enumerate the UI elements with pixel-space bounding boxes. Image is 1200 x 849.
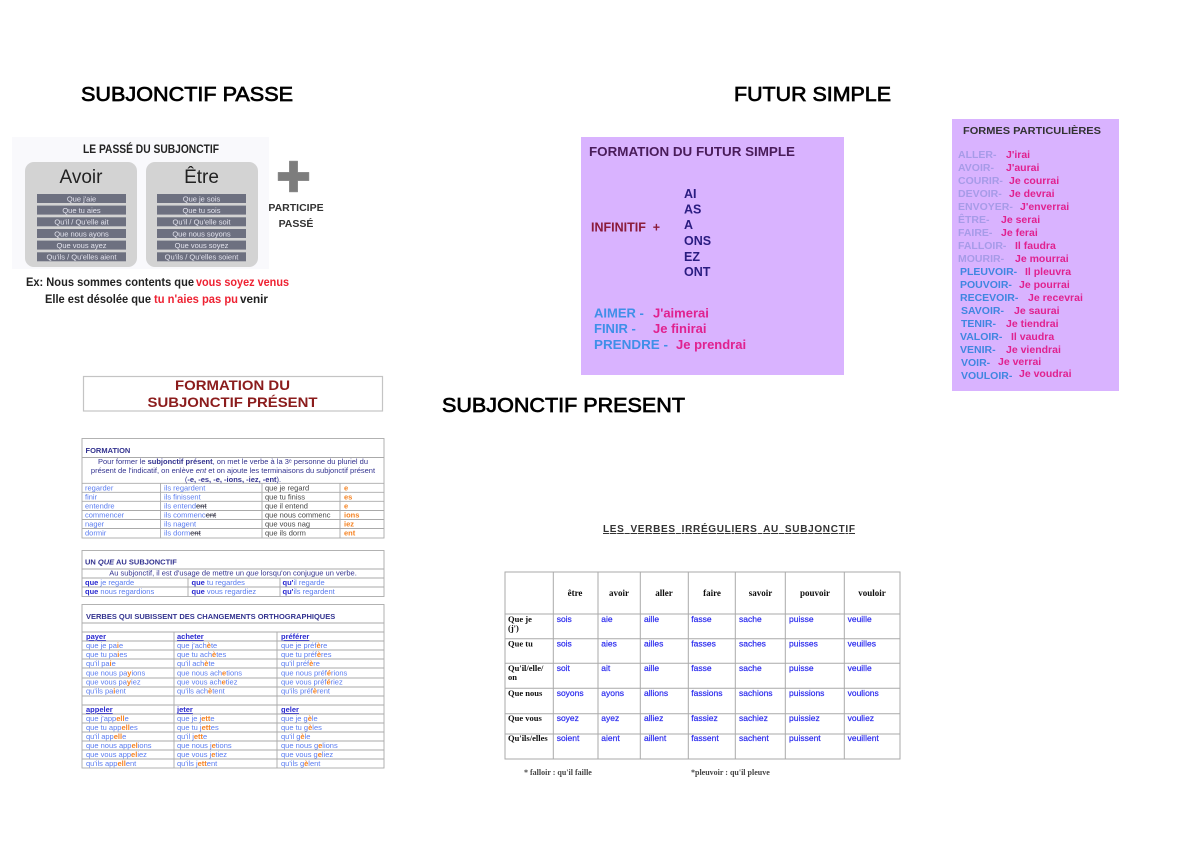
irregular futures list: Il pleuvra	[1025, 266, 1071, 278]
panel: les verbes irréguliers au subjonctif	[505, 522, 900, 777]
table: formation: dormir	[85, 528, 107, 538]
table grid and cells: soyez	[557, 713, 579, 723]
table grid and cells: Que tu	[508, 638, 533, 648]
table grid and cells: puissent	[789, 733, 821, 743]
table grid and cells: savoir	[749, 588, 772, 598]
table: changements orthographiques: que je jette	[177, 714, 215, 723]
table grid and cells: faire	[703, 588, 721, 598]
table grid and cells: fassent	[691, 733, 719, 743]
label: participe passé	[268, 202, 324, 230]
examples: Ex: Nous sommes contents que	[26, 277, 194, 289]
table: formation: FORMATION	[86, 446, 130, 455]
table: changements orthographiques: que vous geliez	[281, 750, 333, 759]
card: être: Qu'il / Qu'elle soit	[173, 218, 231, 227]
panel title: LE PASSÉ DU SUBJONCTIF	[83, 143, 219, 156]
card: avoir: Qu'ils / Qu'elles aient	[47, 253, 117, 262]
examples: Elle est désolée que	[45, 294, 151, 306]
table grid and cells: Que nous	[508, 688, 543, 698]
card: avoir: Que j'aie	[67, 194, 96, 203]
card: avoir: Que nous ayons	[54, 229, 109, 238]
table grid and cells: Que je	[508, 614, 532, 624]
table: formation: ils dorment	[164, 528, 202, 538]
table: changements orthographiques: que tu achètes	[177, 650, 226, 659]
irregular futures list: Je courrai	[1009, 175, 1059, 187]
table: formation: présent de l'indicatif, on enlève ent et on ajoute les terminaisons du subjonctif présent	[91, 466, 376, 475]
table grid and cells: puissiez	[789, 713, 820, 723]
table: formation: finir	[85, 492, 98, 502]
table: changements orthographiques: que vous jetiez	[177, 750, 227, 759]
table grid and cells: ailles	[644, 638, 663, 648]
table: un que au subjonctif: que nous regardions	[85, 587, 154, 596]
table grid and cells: aller	[655, 588, 673, 598]
examples: PRENDRE -	[594, 337, 668, 352]
table grid and cells: (j')	[508, 623, 519, 633]
table: formation: regarder	[85, 484, 114, 492]
irregular futures list: FALLOIR-	[958, 240, 1007, 252]
irregular futures list: VOULOIR-	[961, 370, 1013, 382]
table grid and cells: alliez	[644, 713, 663, 723]
card: avoir: Qu'il / Qu'elle ait	[54, 218, 109, 227]
examples: Je finirai	[653, 321, 706, 336]
table: formation: que tu finiss	[265, 492, 305, 502]
label: participe passé: PARTICIPE	[268, 202, 324, 214]
table: changements orthographiques: que je gèle	[281, 714, 318, 723]
table: formation: que il entend	[265, 502, 308, 510]
table: changements orthographiques: que j'appelle	[86, 714, 129, 723]
table: changements orthographiques: jeter	[176, 705, 193, 714]
examples: venir	[240, 294, 269, 306]
table: changements orthographiques: acheter	[177, 632, 204, 641]
table: changements orthographiques: qu'ils achètent	[177, 686, 226, 696]
table: changements orthographiques: qu'il jette	[177, 732, 207, 741]
table grid and cells: veuille	[848, 614, 872, 624]
card: avoir	[25, 162, 137, 267]
table: changements orthographiques: qu'ils paient	[86, 686, 127, 696]
title box	[84, 376, 382, 411]
table grid and cells: sois	[557, 614, 572, 624]
table: changements orthographiques: que nous achetions	[177, 668, 242, 678]
card: avoir: Que tu aies	[62, 206, 101, 215]
table grid and cells: sache	[739, 614, 762, 624]
table grid and cells: veuilles	[848, 638, 876, 648]
irregular futures list: Je tiendrai	[1006, 318, 1059, 330]
irregular futures list: Je pourrai	[1019, 279, 1070, 291]
table: changements orthographiques: payer	[86, 632, 106, 641]
table: changements orthographiques: que tu gèles	[281, 723, 322, 732]
table grid and cells: aille	[644, 663, 659, 673]
footnotes: * falloir : qu'il faille	[524, 768, 592, 777]
table grid and cells	[505, 572, 900, 759]
table: formation: es	[344, 492, 352, 502]
table grid and cells: fasse	[691, 614, 712, 624]
table grid and cells: aille	[644, 614, 659, 624]
irregular futures list: Je mourrai	[1015, 253, 1069, 265]
infinitif plus: INFINITIF +	[591, 220, 660, 234]
card: être: Qu'ils / Qu'elles soient	[165, 253, 239, 262]
footnotes: *pleuvoir : qu'il pleuve	[691, 768, 770, 777]
table grid and cells: sache	[739, 663, 762, 673]
irregular futures list: TENIR-	[961, 318, 996, 330]
table grid and cells: fasse	[691, 663, 712, 673]
table grid and cells: sachions	[739, 688, 773, 698]
table: un que au subjonctif: qu'ils regardent	[282, 587, 336, 596]
panel: le passé du subjonctif	[12, 137, 324, 306]
table grid and cells: Qu'ils/elles	[508, 733, 548, 743]
table: formation: que nous commenc	[265, 510, 331, 520]
table: changements orthographiques: geler	[281, 705, 299, 714]
table grid and cells: puisses	[789, 638, 818, 648]
table: formation: nager	[85, 520, 105, 528]
table: changements orthographiques: que vous payiez	[86, 678, 141, 686]
irregular futures list: J'aurai	[1006, 162, 1040, 174]
table: changements orthographiques: que tu jettes	[177, 723, 219, 732]
endings list: EZ	[684, 250, 700, 264]
table grid and cells: puisse	[789, 663, 814, 673]
table: changements orthographiques	[82, 604, 384, 768]
irregular futures list: ALLER-	[958, 149, 997, 161]
footnotes	[524, 768, 770, 777]
table: formation: e	[344, 484, 348, 492]
table grid and cells: vouliez	[848, 713, 874, 723]
card: avoir: Avoir	[60, 167, 103, 188]
endings list: ONT	[684, 265, 711, 279]
table grid and cells: fassions	[691, 688, 722, 698]
table: changements orthographiques: appeler	[86, 705, 113, 714]
table: changements orthographiques: que vous achetiez	[177, 678, 238, 686]
irregular futures list	[958, 149, 1083, 382]
table: changements orthographiques: qu'ils préfèrent	[281, 686, 331, 696]
irregular futures list: Je serai	[1001, 214, 1040, 226]
table: formation: ils commencent	[164, 510, 217, 520]
table grid and cells: sachiez	[739, 713, 768, 723]
panel title: FORMATION DU FUTUR SIMPLE	[589, 145, 795, 159]
table grid and cells: aillent	[644, 733, 667, 743]
table: formation: commencer	[85, 510, 125, 520]
table: changements orthographiques: que nous gelions	[281, 741, 338, 750]
table grid and cells: voulions	[848, 688, 879, 698]
endings list: ONS	[684, 234, 711, 248]
table: formation: ils entendent	[164, 502, 207, 510]
endings list: A	[684, 218, 693, 232]
table: un que au subjonctif: Au subjonctif, il est d'usage de mettre un que lorsqu'on conjugue un verbe.	[109, 569, 357, 578]
table grid and cells: pouvoir	[800, 588, 830, 598]
endings list: AI	[684, 187, 696, 201]
examples	[594, 306, 746, 352]
table: changements orthographiques: qu'il achète	[177, 659, 215, 668]
table grid and cells: puissions	[789, 688, 824, 698]
table: formation: ions	[344, 510, 359, 520]
irregular futures list: Je viendrai	[1006, 344, 1061, 356]
table: changements orthographiques: que nous jetions	[177, 741, 232, 750]
irregular futures list: Il faudra	[1015, 240, 1056, 252]
heading: futur simple: FUTUR SIMPLE	[734, 84, 891, 106]
table grid and cells: puisse	[789, 614, 814, 624]
table: formation: que vous nag	[265, 520, 310, 528]
table: formation: Pour former le subjonctif présent, on met le verbe à la 3ᵉ personne du pluriel du	[98, 457, 368, 466]
table: formation: que je regard	[265, 484, 309, 492]
table grid and cells: aies	[601, 638, 617, 648]
table: changements orthographiques: que tu appelles	[86, 723, 138, 732]
table grid and cells: saches	[739, 638, 766, 648]
table grid and cells: aie	[601, 614, 613, 624]
irregular futures list: Il vaudra	[1011, 331, 1054, 343]
irregular futures list: FAIRE-	[958, 227, 993, 239]
table: changements orthographiques: VERBES QUI SUBISSENT DES CHANGEMENTS ORTHOGRAPHIQUES	[86, 612, 335, 621]
table: changements orthographiques: qu'il appelle	[86, 732, 126, 741]
table: changements orthographiques: que tu préfères	[281, 650, 332, 659]
heading: subjonctif present: SUBJONCTIF PRESENT	[442, 395, 685, 417]
table: formation: ils regardent	[164, 484, 206, 492]
irregular futures list: Je voudrai	[1019, 368, 1072, 380]
irregular futures list: ÊTRE-	[958, 213, 990, 226]
table: formation: que ils dorm	[265, 528, 306, 538]
irregular futures list: ENVOYER-	[958, 201, 1013, 213]
panel: formation du futur simple	[581, 137, 844, 375]
panel: formation du subjonctif présent	[82, 376, 384, 768]
icon: plus sign	[278, 161, 309, 192]
heading: subjonctif passe: SUBJONCTIF PASSE	[81, 84, 293, 106]
irregular futures list: VOIR-	[961, 357, 991, 369]
panel: formes particulières	[952, 119, 1119, 391]
irregular futures list: Je devrai	[1009, 188, 1055, 200]
irregular futures list: Je recevrai	[1028, 292, 1083, 304]
irregular futures list: J'enverrai	[1020, 201, 1069, 213]
table: changements orthographiques: qu'ils gèlent	[281, 759, 321, 768]
table grid and cells: ayez	[601, 713, 619, 723]
irregular futures list: RECEVOIR-	[960, 292, 1019, 304]
title box: FORMATION DU	[175, 377, 290, 393]
examples: Je prendrai	[676, 337, 746, 352]
table grid and cells: ait	[601, 663, 611, 673]
irregular futures list: POUVOIR-	[960, 279, 1012, 291]
table grid and cells: ayons	[601, 688, 624, 698]
card: être: Être	[184, 166, 219, 188]
table: changements orthographiques: que je paie	[86, 641, 123, 650]
table grid and cells: être	[568, 588, 582, 598]
endings list	[684, 187, 711, 279]
table grid and cells: vouloir	[858, 588, 886, 598]
table grid and cells: veuillent	[848, 733, 879, 743]
table: changements orthographiques: qu'il paie	[86, 659, 116, 668]
panel title: FORMES PARTICULIÈRES	[963, 124, 1101, 137]
card: être: Que vous soyez	[175, 241, 229, 250]
card: avoir: Que vous ayez	[56, 241, 107, 250]
irregular futures list: MOURIR-	[958, 253, 1005, 265]
table: un que au subjonctif: que je regarde	[85, 578, 134, 587]
table grid and cells: fasses	[691, 638, 716, 648]
irregular futures list: DEVOIR-	[958, 188, 1002, 200]
table grid and cells: aient	[601, 733, 620, 743]
irregular futures list: J'irai	[1006, 149, 1030, 161]
table: changements orthographiques: qu'ils appellent	[86, 759, 137, 768]
irregular futures list: Je verrai	[998, 356, 1041, 368]
label: participe passé: PASSÉ	[279, 217, 313, 230]
table: changements orthographiques: que vous préfériez	[281, 678, 343, 686]
table: formation: entendre	[85, 502, 115, 510]
table: formation	[82, 438, 384, 538]
panel title: LES VERBES IRRÉGULIERS AU SUBJONCTIF	[603, 522, 855, 535]
table grid and cells: sachent	[739, 733, 769, 743]
table grid and cells: soit	[557, 663, 571, 673]
table: formation: ent	[344, 528, 356, 538]
irregular futures list: Je saurai	[1014, 305, 1060, 317]
table: un que au subjonctif: que vous regardiez	[192, 587, 256, 596]
examples: vous soyez venus	[196, 277, 289, 289]
title box: SUBJONCTIF PRÉSENT	[148, 394, 318, 410]
table: formation: ils finissent	[164, 492, 202, 502]
irregular futures list: SAVOIR-	[961, 305, 1004, 317]
table: changements orthographiques: préférer	[281, 632, 309, 641]
table: un que au subjonctif: qu'il regarde	[282, 578, 325, 587]
table: changements orthographiques: que je préfère	[281, 641, 327, 650]
table grid and cells: soient	[557, 733, 580, 743]
table grid and cells: soyons	[557, 688, 584, 698]
table grid and cells: allions	[644, 688, 668, 698]
irregular futures list: Je ferai	[1001, 227, 1038, 239]
table: changements orthographiques: qu'il préfère	[281, 659, 320, 668]
table: changements orthographiques: qu'ils jettent	[177, 759, 218, 768]
card: être: Que nous soyons	[172, 229, 231, 238]
examples: tu n'aies pas pu	[154, 294, 238, 306]
irregular futures list: VALOIR-	[960, 331, 1003, 343]
table: changements orthographiques: que nous appelions	[86, 741, 152, 750]
irregular futures list: VENIR-	[960, 344, 996, 356]
examples: J'aimerai	[653, 306, 709, 320]
card: être	[146, 162, 258, 267]
card: être: Que tu sois	[183, 206, 221, 215]
table: un que au subjonctif	[82, 550, 384, 596]
table: changements orthographiques: que vous appeliez	[86, 750, 147, 759]
table: changements orthographiques: que nous payions	[86, 668, 145, 678]
table grid and cells: on	[508, 672, 517, 682]
examples: AIMER -	[594, 306, 644, 320]
table: changements orthographiques: que j'achète	[177, 641, 217, 650]
table: changements orthographiques: que nous préférions	[281, 668, 348, 678]
table grid and cells: avoir	[609, 588, 629, 598]
card: être: Que je sois	[183, 194, 221, 203]
table grid and cells: sois	[557, 638, 572, 648]
table grid and cells: Que vous	[508, 713, 542, 723]
table: formation: ils nagent	[164, 520, 197, 528]
table: un que au subjonctif: UN QUE AU SUBJONCTIF	[85, 558, 177, 567]
table: formation: (-e, -es, -e, -ions, -iez, -ent).	[185, 475, 281, 484]
table grid and cells: Qu'il/elle/	[508, 663, 544, 673]
table: formation: iez	[344, 520, 354, 528]
irregular futures list: COURIR-	[958, 175, 1003, 187]
endings list: AS	[684, 202, 701, 216]
table grid and cells: veuille	[848, 663, 872, 673]
table: changements orthographiques: qu'il gèle	[281, 732, 310, 741]
table: un que au subjonctif: que tu regardes	[192, 578, 245, 587]
table: formation: e	[344, 502, 348, 510]
irregular futures list: PLEUVOIR-	[960, 266, 1018, 278]
examples	[26, 277, 289, 306]
examples: FINIR -	[594, 321, 636, 336]
irregular futures list: AVOIR-	[958, 162, 994, 174]
table: changements orthographiques: que tu paies	[86, 650, 128, 659]
table grid and cells: fassiez	[691, 713, 718, 723]
